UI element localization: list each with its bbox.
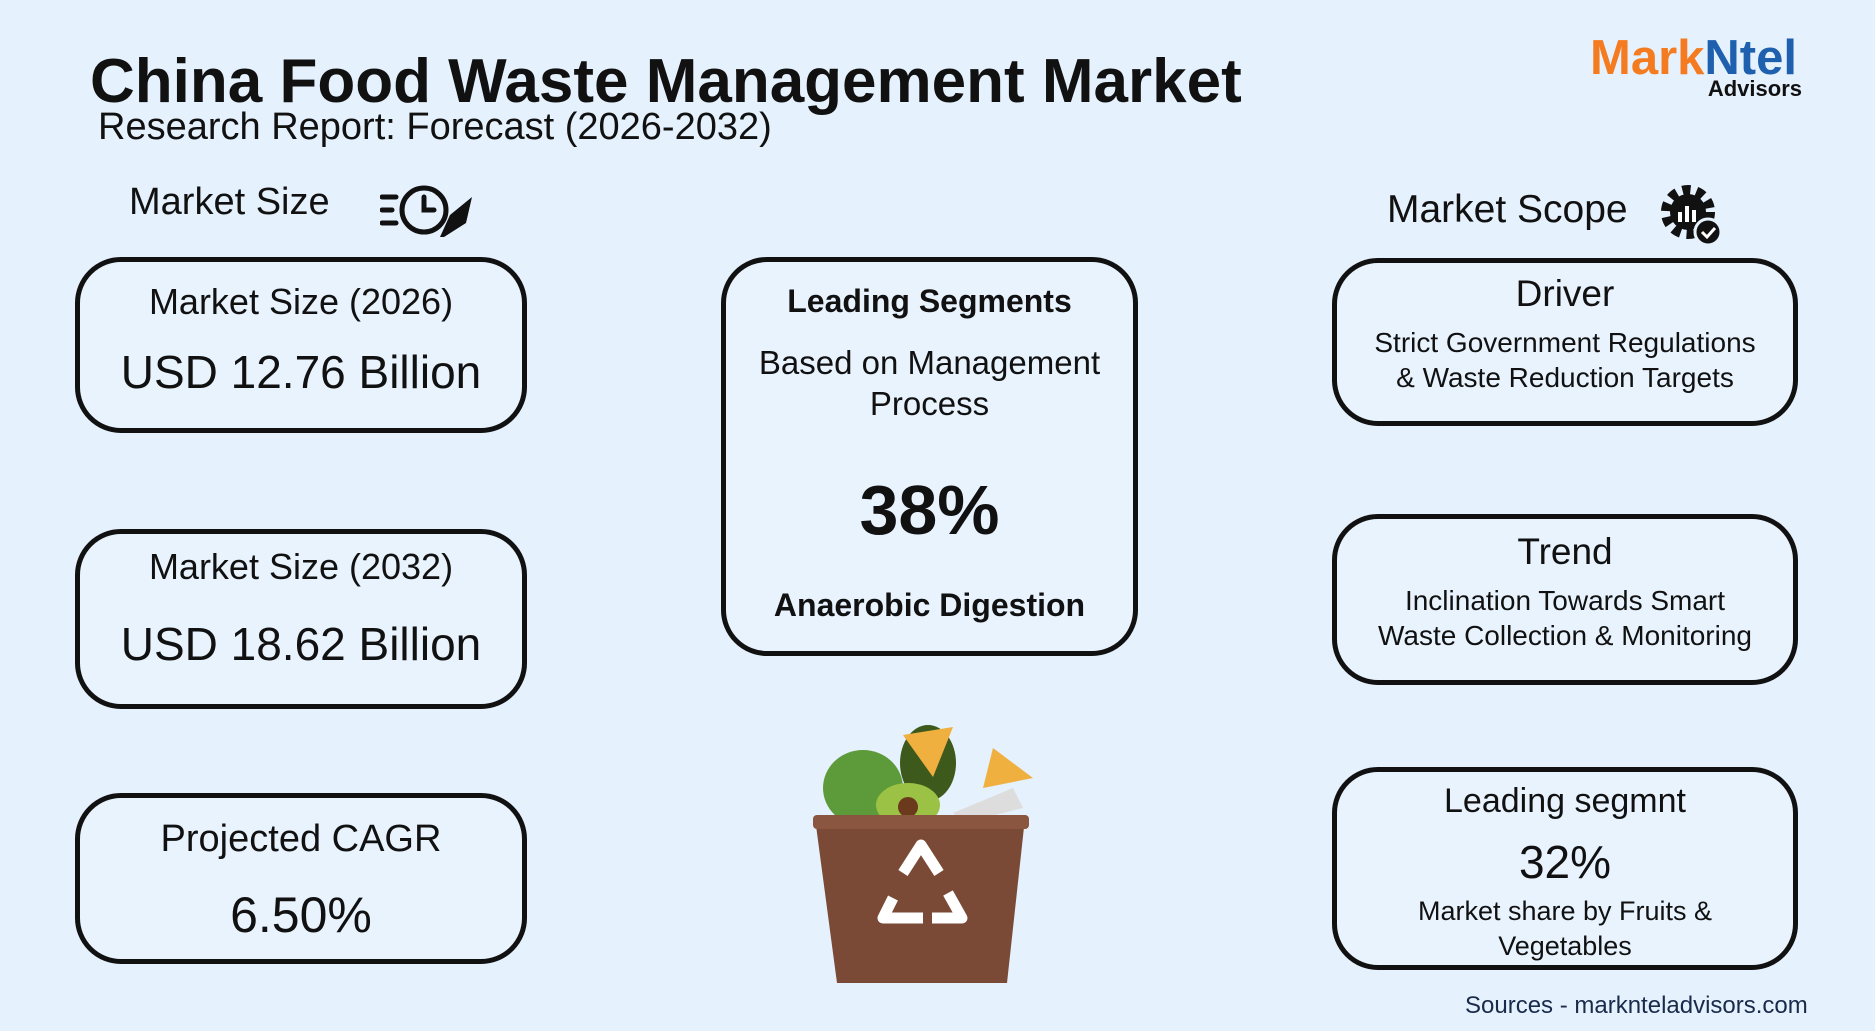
panel: leading segment: Vegetables xyxy=(1498,931,1632,961)
panel: leading segments xyxy=(721,257,1138,656)
panel: market size 2026: Market Size (2026) xyxy=(149,281,453,322)
panel: trend: Trend xyxy=(1517,531,1613,572)
illustration: food waste bin xyxy=(813,725,1033,983)
panel: CAGR: Projected CAGR xyxy=(161,818,441,860)
panel: market size 2032: Market Size (2032) xyxy=(149,546,453,587)
panel: market size 2032 xyxy=(75,529,527,709)
panel: market size 2032: USD 18.62 Billion xyxy=(121,618,481,670)
panel: CAGR xyxy=(75,793,527,964)
icon: clock rocket xyxy=(380,186,472,237)
panel: market size 2026 xyxy=(75,257,527,433)
panel: driver: Driver xyxy=(1516,273,1614,314)
logo: Advisors xyxy=(1708,76,1802,101)
panel: leading segments: Process xyxy=(870,385,989,422)
title: China Food Waste Management Market xyxy=(90,47,1242,116)
panel: leading segments: Anaerobic Digestion xyxy=(774,587,1085,623)
logo: MarkNtel xyxy=(1590,31,1797,85)
panel: driver: & Waste Reduction Targets xyxy=(1396,362,1734,393)
panel: trend xyxy=(1332,514,1798,685)
heading: market scope: Market Scope xyxy=(1387,188,1628,231)
panel: CAGR: 6.50% xyxy=(230,887,372,943)
panel: leading segments: Based on Management xyxy=(759,344,1100,381)
icon: gear xyxy=(1661,185,1720,244)
panel: trend: Waste Collection & Monitoring xyxy=(1378,620,1752,651)
panel: leading segment: Leading segmnt xyxy=(1444,782,1686,820)
panel: leading segment xyxy=(1332,767,1798,970)
panel: market size 2026: USD 12.76 Billion xyxy=(121,346,481,398)
footer: sources: Sources - marknteladvisors.com xyxy=(1465,992,1808,1019)
heading: market size: Market Size xyxy=(129,181,330,223)
panel: leading segment: 32% xyxy=(1519,836,1611,888)
panel: driver: Strict Government Regulations xyxy=(1374,327,1756,358)
panel: driver xyxy=(1332,258,1798,426)
panel: trend: Inclination Towards Smart xyxy=(1405,585,1725,616)
panel: leading segments: 38% xyxy=(859,471,1000,549)
subtitle: Research Report: Forecast (2026-2032) xyxy=(98,106,772,148)
panel: leading segment: Market share by Fruits & xyxy=(1418,896,1712,926)
panel: leading segments: Leading Segments xyxy=(787,283,1072,319)
